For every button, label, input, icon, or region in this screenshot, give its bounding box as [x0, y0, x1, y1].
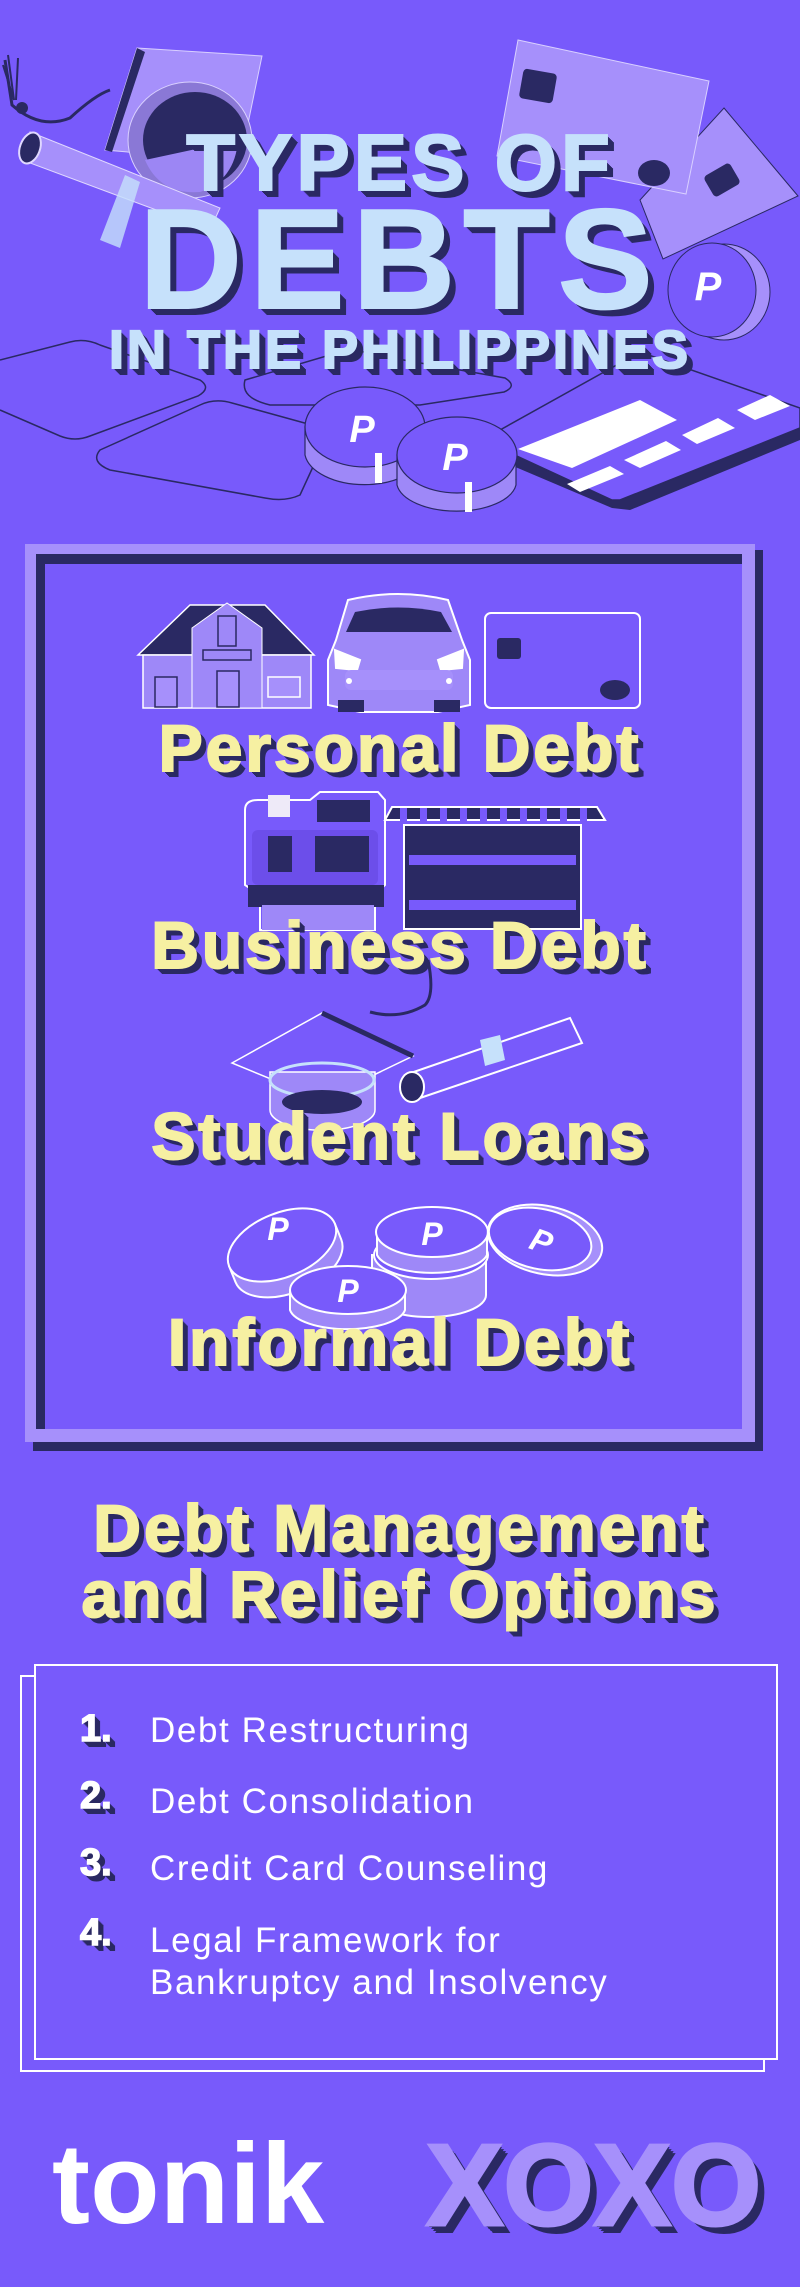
icon: coins: P: [267, 1211, 289, 1247]
item 3: 3.: [80, 1842, 112, 1884]
heading: Student Loans: Student Loans: [151, 1099, 649, 1173]
icon: coins: P: [337, 1273, 359, 1309]
heading: Personal Debt: Personal Debt: [159, 711, 641, 785]
item 4: Legal Framework for: [150, 1921, 501, 1960]
icon: house: [138, 603, 314, 708]
heading: Debt Management and Relief Options: [81, 1491, 719, 1636]
list box: [21, 1665, 777, 2071]
decoration: credit card front: [497, 40, 709, 194]
decoration: credit card back: [640, 108, 798, 259]
heading: Business Debt: Business Debt: [151, 908, 649, 982]
item 4: [80, 1912, 608, 2002]
decoration: bottom coins: P: [349, 409, 375, 451]
item 4: Bankruptcy and Insolvency: [150, 1963, 608, 2002]
decoration: diploma: [15, 130, 220, 248]
icon: cash register: [245, 792, 385, 930]
item 2: Debt Consolidation: [150, 1782, 475, 1821]
item 1: 1.: [80, 1708, 112, 1750]
decoration: bottom coins: [305, 387, 517, 512]
decoration: bottom coins: P: [442, 437, 468, 479]
list items: [80, 1708, 608, 2002]
icon: credit card: [485, 613, 640, 708]
item 1: Debt Restructuring: [150, 1711, 471, 1750]
item 4: 4.: [80, 1912, 112, 1954]
icon: coins: P: [421, 1216, 443, 1252]
icon: graduation cap: [232, 1013, 413, 1130]
title line 1: TYPES OF: [186, 118, 614, 207]
logo: XOXO: XOXO: [426, 2120, 761, 2250]
heading: Debt Management and Relief Options: Debt Management: [93, 1491, 707, 1565]
item 3: Credit Card Counseling: [150, 1849, 549, 1888]
item 2: 2.: [80, 1775, 112, 1817]
heading: Informal Debt: Informal Debt: [168, 1305, 632, 1379]
decoration: coin right: [668, 243, 770, 340]
icon: tassel: [370, 960, 431, 1015]
decoration: coin right: P: [695, 265, 722, 309]
title line 3: IN THE PHILIPPINES: [109, 320, 691, 380]
icon: car: [328, 594, 470, 712]
heading: Debt Management and Relief Options: and Relief Options: [81, 1557, 719, 1631]
decoration: floor tiles: [0, 341, 511, 499]
title: [109, 118, 693, 380]
icon: diploma: [400, 1018, 582, 1102]
decoration: keyboard/card plate: [480, 352, 800, 510]
logo: tonik: tonik: [52, 2121, 324, 2248]
item 2: [80, 1775, 475, 1821]
title line 2: DEBTS: [139, 180, 661, 339]
icon: coins: P: [525, 1221, 558, 1262]
decoration: graduation cap: [3, 48, 262, 198]
icon: shop stall: [385, 807, 605, 929]
panel frame: types of debts: [25, 544, 763, 1451]
icon: coins: [217, 1194, 609, 1329]
